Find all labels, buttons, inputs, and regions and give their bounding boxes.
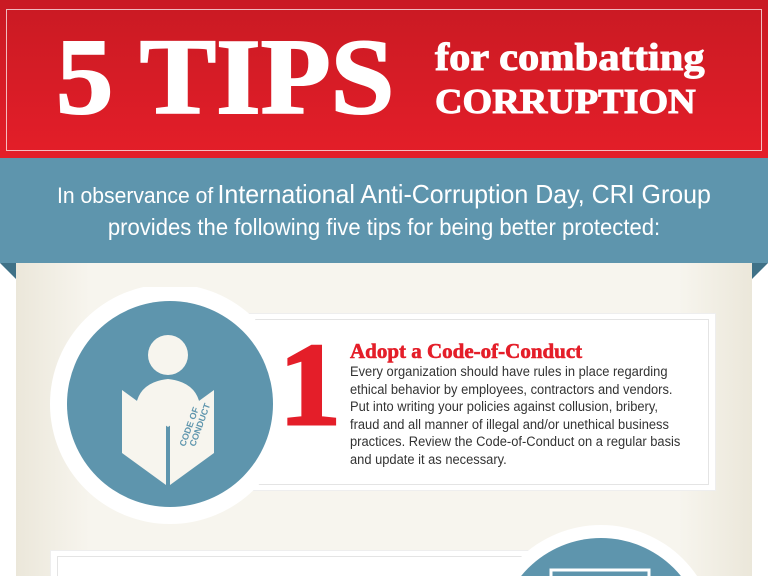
intro band	[0, 158, 768, 263]
tip number 1: 1	[279, 319, 341, 450]
tip 2 panel (partial)	[50, 525, 697, 576]
tip 1 body: ethical behavior by employees, contractors and vendors.	[350, 382, 672, 397]
header: red banner	[0, 0, 768, 158]
cream content panel	[16, 263, 752, 576]
tip 1 heading: Adopt a Code-of-Conduct	[350, 339, 582, 363]
icon: circle with reader: CODE OF	[177, 405, 201, 448]
subtitle: for combatting corruption	[434, 36, 705, 121]
intro text: In observance of International Anti-Corruption Day, CRI Group	[57, 179, 711, 209]
header inner border	[6, 9, 762, 151]
subtitle: for combatting corruption: CORRUPTION	[435, 82, 696, 121]
tip 1 text box	[248, 313, 716, 491]
intro text: provides the following five tips for being better protected:	[108, 214, 660, 240]
tip 1 panel	[50, 287, 716, 524]
subtitle: for combatting corruption: for combatting	[435, 36, 705, 79]
tip 1 body: Put into writing your policies against collusion, bribery,	[350, 399, 658, 414]
tip 1 body	[350, 364, 680, 467]
fold corners	[0, 263, 16, 279]
tip 2 text box	[50, 550, 550, 576]
tip 1 body: and update it as necessary.	[350, 452, 507, 467]
tip 1 body: Every organization should have rules in place regarding	[350, 364, 667, 379]
icon: circle with reader: CONDUCT	[187, 402, 212, 448]
tip 1 body: practices. Review the Code-of-Conduct on a regular basis	[350, 434, 680, 449]
icon: circle 2	[521, 525, 697, 576]
tip 1 body: fraud and all manner of illegal and/or unethical business	[350, 417, 669, 432]
icon: circle with reader	[50, 287, 273, 524]
intro text	[57, 179, 711, 240]
title: 5 TIPS: 5 TIPS	[56, 18, 394, 137]
